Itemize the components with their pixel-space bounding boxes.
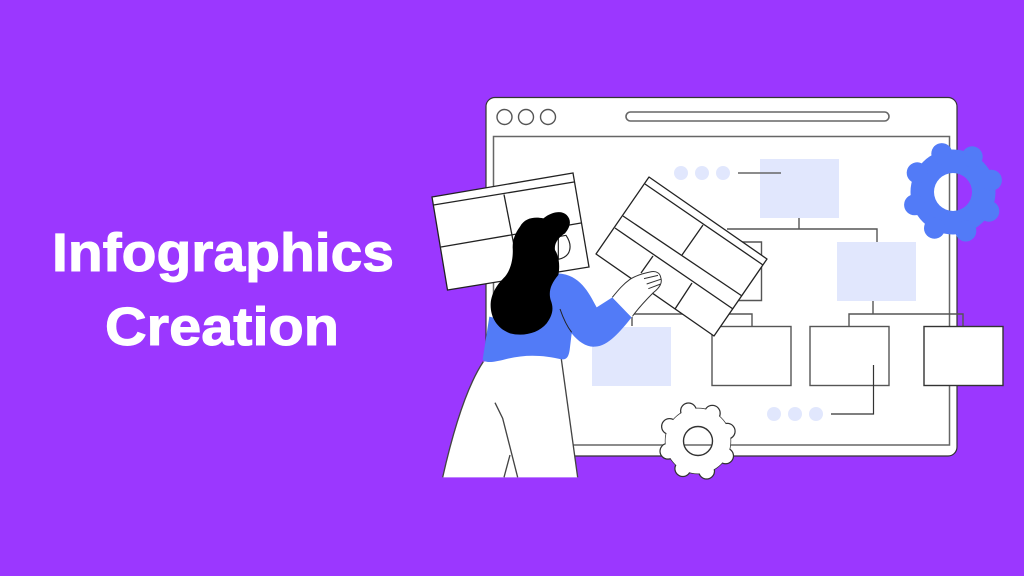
back tilted panel [432, 173, 589, 290]
light box right [837, 242, 916, 301]
gear hole ring [684, 426, 712, 456]
light box left [592, 327, 671, 386]
flowchart connectors [632, 218, 963, 326]
face [558, 235, 570, 259]
window buttons [497, 110, 556, 124]
window content frame [494, 136, 950, 445]
browser window [486, 98, 957, 456]
hair [491, 212, 570, 335]
lower dots with leader [767, 365, 874, 421]
title [52, 223, 394, 357]
light box top [760, 159, 839, 218]
address bar [626, 112, 889, 121]
flowchart [592, 159, 1003, 421]
icon: white gear [660, 403, 735, 479]
sleeve fold [560, 309, 572, 332]
hand over panel [612, 272, 661, 317]
trousers [443, 357, 578, 477]
title: Infographics [52, 223, 394, 283]
upper dots with leader [674, 166, 781, 180]
person [443, 212, 632, 477]
icon: blue gear [904, 143, 1002, 242]
outlined boxes [712, 326, 1003, 386]
front tilted panel [596, 177, 767, 336]
title: Creation [105, 297, 339, 357]
blue sweater [483, 273, 632, 362]
